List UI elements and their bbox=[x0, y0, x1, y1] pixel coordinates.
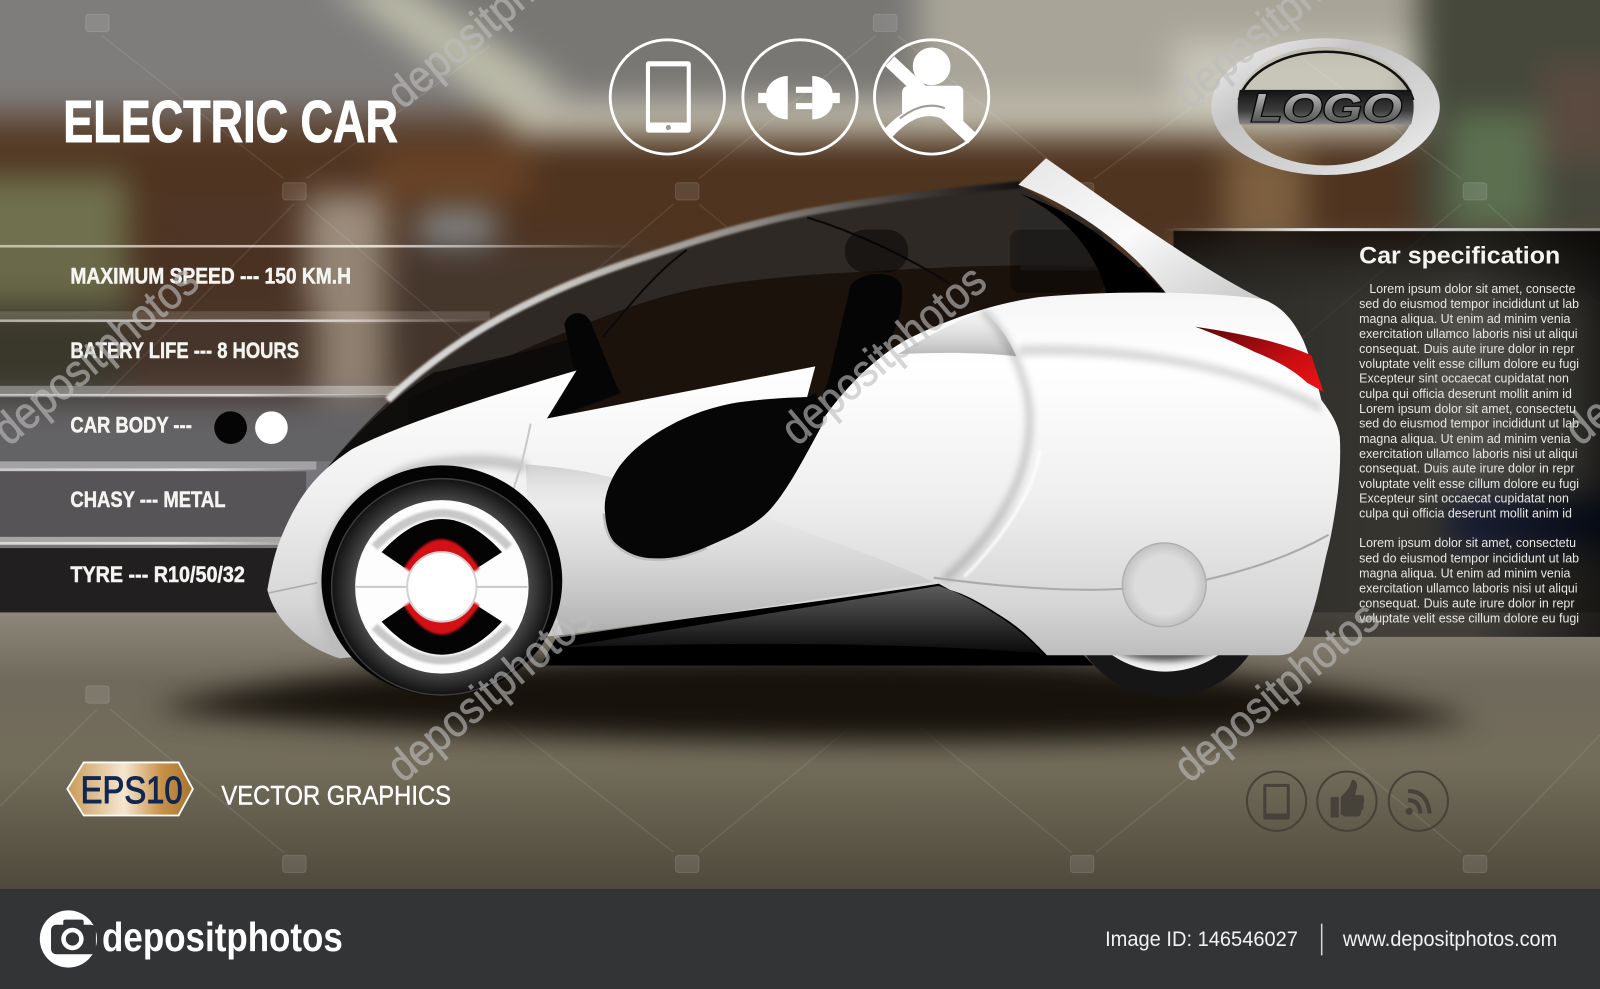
panel: car specification bbox=[1163, 228, 1600, 637]
lower door shading bbox=[526, 464, 934, 635]
divider bbox=[1321, 924, 1322, 955]
specification body text: Excepteur sint occaecat cupidatat non bbox=[1359, 371, 1569, 386]
image id: Image ID: 146546027 bbox=[1105, 927, 1298, 951]
floor bbox=[0, 612, 1600, 890]
interior reflections bbox=[807, 194, 1168, 296]
specification body text: consequat. Duis aute irure dolor in repr bbox=[1359, 341, 1575, 356]
diagonal depositphotos watermarks: depositphotos bbox=[377, 591, 602, 792]
side door window bbox=[605, 393, 823, 558]
icon: tablet bbox=[1247, 772, 1306, 831]
faint camera watermarks bbox=[86, 14, 1487, 873]
icon: plug and socket bbox=[743, 40, 857, 154]
specification body text: sed do eiusmod tempor incididunt ut lab bbox=[1359, 296, 1579, 311]
colour swatch: white bbox=[255, 411, 288, 444]
specification body text: Lorem ipsum dolor sit amet, consecte bbox=[1369, 281, 1576, 296]
spec: car body: CAR BODY --- bbox=[70, 413, 192, 438]
specification body text: consequat. Duis aute irure dolor in repr bbox=[1359, 461, 1575, 476]
icon: seat belt bbox=[874, 40, 989, 154]
fender shading bbox=[323, 461, 526, 653]
glass canopy bbox=[289, 186, 1168, 526]
dark front cowl bbox=[289, 337, 622, 526]
title: ELECTRIC CAR bbox=[63, 88, 398, 155]
vector graphics caption: VECTOR GRAPHICS bbox=[221, 780, 451, 810]
specification body text: Excepteur sint occaecat cupidatat non bbox=[1359, 491, 1569, 506]
specification body text: magna aliqua. Ut enim ad minim venia bbox=[1359, 311, 1571, 326]
car body bbox=[267, 293, 1340, 658]
icon row: features bbox=[610, 40, 989, 154]
specification body text: culpa qui officia deserunt mollit anim id bbox=[1359, 386, 1572, 401]
front wheel bbox=[321, 465, 562, 696]
window lower rim bbox=[605, 513, 706, 558]
specification body text bbox=[1359, 281, 1579, 626]
specification body text: voluptate velit esse cillum dolore eu fugi bbox=[1359, 356, 1579, 371]
windshield pillar line bbox=[603, 250, 687, 337]
depositphotos wordmark: depositphotos bbox=[102, 914, 343, 960]
front seam bbox=[513, 424, 531, 490]
rear door arc bbox=[944, 310, 1030, 580]
website url: www.depositphotos.com bbox=[1342, 927, 1557, 951]
specification body text: magna aliqua. Ut enim ad minim venia bbox=[1359, 566, 1571, 581]
specification body text: Lorem ipsum dolor sit amet, consectetu bbox=[1359, 401, 1576, 416]
lower glass tint bbox=[408, 265, 1168, 449]
specification body text: exercitation ullamco laboris nisi ut aliqui bbox=[1359, 326, 1578, 341]
footer bar bbox=[0, 889, 1600, 989]
specification body text: magna aliqua. Ut enim ad minim venia bbox=[1359, 431, 1571, 446]
heading: car specification: Car specification bbox=[1359, 242, 1560, 269]
sill bbox=[563, 586, 1043, 653]
icon row: social bbox=[1247, 772, 1448, 831]
nose crease bbox=[268, 583, 317, 593]
spec: tyre: TYRE --- R10/50/32 bbox=[70, 562, 245, 587]
spec: chassis: CHASY --- METAL bbox=[70, 487, 226, 512]
diagonal depositphotos watermarks: depositphotos bbox=[771, 254, 996, 455]
specification body text: exercitation ullamco laboris nisi ut aliqui bbox=[1359, 580, 1578, 595]
specification body text: voluptate velit esse cillum dolore eu fugi bbox=[1359, 476, 1579, 491]
upper body fold bbox=[1016, 345, 1321, 413]
spec: maximum speed: MAXIMUM SPEED --- 150 KM.H bbox=[70, 264, 351, 289]
roof chrome trim bbox=[388, 185, 1020, 400]
depositphotos camera logo bbox=[40, 910, 97, 968]
diagonal depositphotos watermarks: depositphotos bbox=[1163, 591, 1389, 792]
colour swatch: black bbox=[214, 411, 247, 444]
EPS10 badge: EPS10 bbox=[81, 769, 183, 811]
door arc highlight bbox=[964, 450, 1040, 577]
underbody bbox=[541, 582, 1094, 665]
icon: smartphone bbox=[610, 40, 724, 154]
door top shading bbox=[898, 310, 1016, 356]
specification body text: Lorem ipsum dolor sit amet, consectetu bbox=[1359, 535, 1576, 550]
EPS10 badge bbox=[67, 762, 193, 815]
specification body text: voluptate velit esse cillum dolore eu fugi bbox=[1359, 611, 1579, 626]
fuel cap bbox=[1122, 543, 1206, 627]
spec: battery life: BATERY LIFE --- 8 HOURS bbox=[70, 338, 299, 363]
brand logo badge bbox=[1211, 38, 1440, 175]
specification body text: sed do eiusmod tempor incididunt ut lab bbox=[1359, 416, 1579, 431]
icon: thumbs up bbox=[1317, 772, 1377, 831]
illustration: electric car bbox=[267, 158, 1340, 697]
logo wordmark: LOGO bbox=[1251, 86, 1402, 130]
rear wheel bbox=[1067, 484, 1267, 697]
body crease bbox=[934, 535, 1329, 590]
headrest and seat bbox=[808, 230, 908, 434]
rear pillar bbox=[1018, 158, 1262, 299]
specification body text: consequat. Duis aute irure dolor in repr bbox=[1359, 595, 1575, 610]
specification body text: culpa qui officia deserunt mollit anim id bbox=[1359, 505, 1572, 520]
specification body text: exercitation ullamco laboris nisi ut aliqui bbox=[1359, 446, 1578, 461]
tail light bbox=[1195, 327, 1323, 392]
spec panel: left list bbox=[0, 245, 633, 612]
ground shadow bbox=[153, 653, 1474, 741]
specification body text: sed do eiusmod tempor incididunt ut lab bbox=[1359, 550, 1579, 565]
rear seat post bbox=[551, 313, 619, 418]
icon: rss bbox=[1389, 772, 1448, 831]
